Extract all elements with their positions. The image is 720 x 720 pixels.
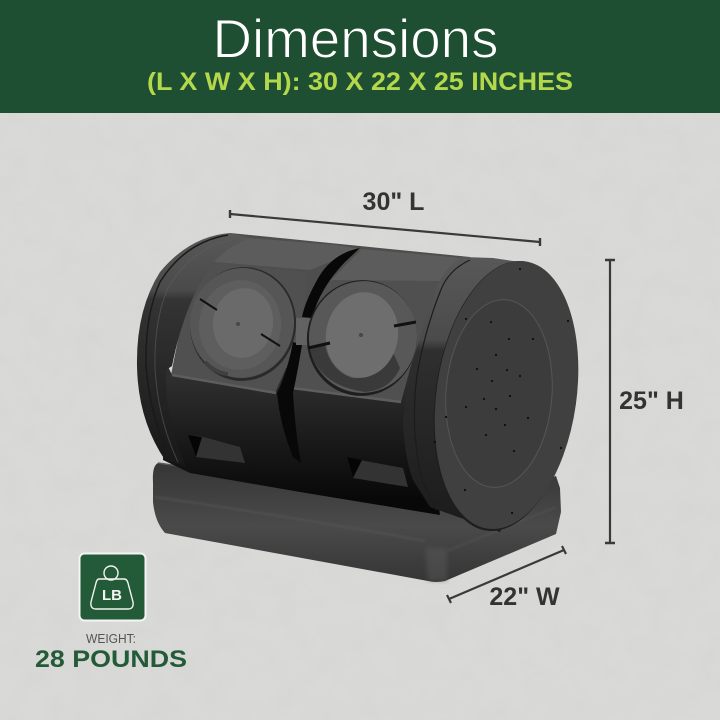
weight value: 28 POUNDS	[35, 646, 187, 673]
length dimension line	[230, 210, 540, 246]
end cap disc	[417, 252, 595, 540]
handle recesses	[188, 435, 408, 487]
header banner	[0, 0, 720, 113]
drum lower body	[163, 360, 440, 515]
left lid	[183, 260, 303, 388]
title: Dimensions	[212, 8, 498, 70]
height label: 25" H	[619, 387, 684, 415]
drum silhouette base	[170, 233, 470, 400]
weight caption: WEIGHT:	[86, 631, 136, 646]
dark side slit	[174, 268, 212, 362]
icon: weight badge: LB	[102, 587, 122, 604]
width label: 22" W	[489, 583, 560, 611]
width dimension line	[447, 546, 566, 603]
height dimension line	[605, 260, 615, 543]
drum left rim	[137, 233, 250, 466]
icon: weight badge	[80, 554, 146, 620]
right lid	[298, 271, 426, 405]
drum upper strip	[214, 238, 362, 270]
drum right collar	[403, 257, 560, 532]
base tray	[153, 463, 561, 582]
product: tumbling composter	[137, 233, 595, 582]
subtitle: overall dimensions: (L X W X H): 30 X 22 X 25 INCHES	[147, 68, 573, 96]
drum upper panels	[172, 262, 306, 393]
length label: 30" L	[363, 188, 424, 216]
center groove	[277, 248, 360, 463]
vent holes	[434, 268, 569, 514]
